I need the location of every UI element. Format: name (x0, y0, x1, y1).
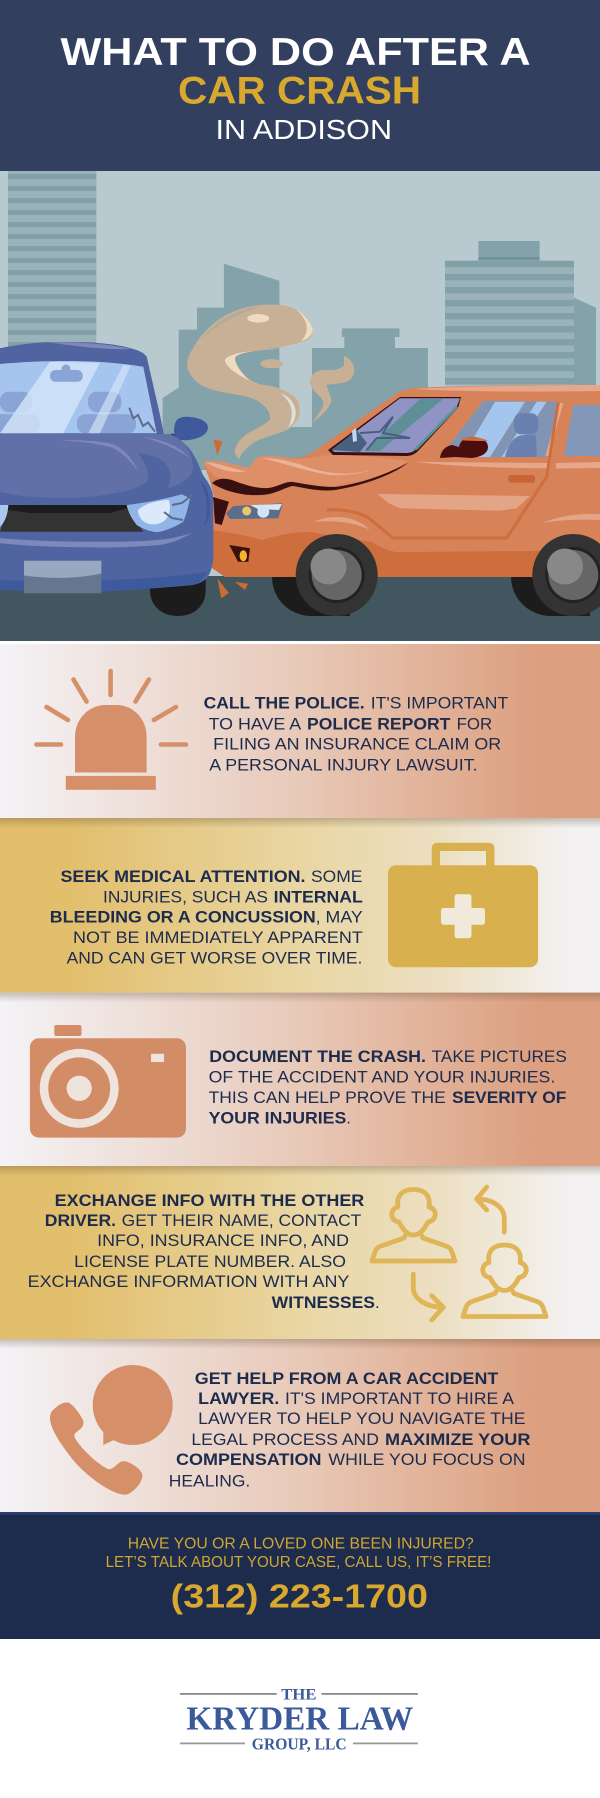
person two (463, 1245, 546, 1316)
text: get help from a lawyer: LAWYER. (198, 1389, 279, 1408)
title line: car crash: CAR CRASH (178, 70, 421, 113)
blue car tyre (150, 570, 206, 616)
title line: what to do after a: WHAT TO DO AFTER A (60, 31, 530, 74)
blue car grille (0, 505, 143, 532)
panel: call the police (0, 644, 600, 818)
text: call the police: POLICE REPORT (307, 715, 450, 734)
text: document the crash: SEVERITY OF (452, 1088, 566, 1107)
crumpled hood (203, 455, 408, 495)
person one (372, 1190, 455, 1261)
text: get help from a lawyer: LEGAL PROCESS AND (191, 1430, 379, 1449)
bumper fog light (229, 545, 250, 562)
text: get help from a lawyer: HEALING. (169, 1471, 250, 1490)
text: exchange info: WITNESSES (272, 1293, 375, 1312)
text: call the police: FOR (457, 715, 492, 734)
side mirror (440, 437, 488, 458)
text: seek medical attention (50, 867, 363, 968)
text: document the crash (209, 1047, 567, 1127)
blue car body (0, 434, 214, 592)
cta question: HAVE YOU OR A LOVED ONE BEEN INJURED? (128, 1536, 474, 1552)
text: document the crash: TAKE PICTURES (432, 1047, 567, 1066)
text: exchange info: INFO, INSURANCE INFO, AND (97, 1231, 349, 1250)
icon: camera (30, 1025, 186, 1138)
text: exchange info: GET THEIR NAME, CONTACT (122, 1211, 361, 1230)
text: seek medical attention: SOME (311, 867, 362, 886)
text: exchange info (28, 1191, 380, 1312)
hood crack (212, 462, 408, 495)
door crease (327, 403, 558, 538)
arrow down-right (413, 1274, 443, 1320)
text: document the crash: YOUR INJURIES (209, 1108, 346, 1127)
blue car headlight (0, 494, 192, 532)
panel: get help from a lawyer (0, 1339, 600, 1512)
windshield (328, 397, 461, 456)
blue car mirror (171, 417, 208, 441)
text: exchange info: LICENSE PLATE NUMBER. ALSO (74, 1252, 346, 1271)
title line: in addison: IN ADDISON (216, 114, 392, 145)
illustration: car crash scene (0, 171, 600, 641)
icon: first aid kit (388, 843, 538, 967)
text: call the police (204, 694, 508, 774)
sky (0, 171, 600, 641)
text: document the crash: THIS CAN HELP PROVE THE (209, 1088, 446, 1107)
smoke (187, 305, 354, 459)
lower sill (212, 530, 600, 577)
text: seek medical attention: INJURIES, SUCH AS (103, 887, 268, 906)
roof highlight (413, 385, 600, 392)
blue car cabin (0, 342, 164, 435)
orange car (203, 385, 600, 616)
text: get help from a lawyer: LAWYER TO HELP YOU NAVIGATE THE (198, 1409, 525, 1428)
phone number: (312) 223-1700 (171, 1578, 428, 1616)
blue car windshield (0, 361, 157, 433)
text: exchange info: EXCHANGE INFORMATION WITH ANY (28, 1272, 349, 1291)
text: get help from a lawyer: GET HELP FROM A CAR ACCIDENT (195, 1369, 498, 1388)
text: seek medical attention: , MAY (316, 907, 363, 926)
road (0, 576, 600, 641)
licence plate (24, 561, 101, 593)
text: call the police: TO HAVE A (209, 715, 302, 734)
car body (203, 385, 600, 577)
rear tyres shadow (272, 560, 350, 616)
icon: siren (36, 671, 186, 790)
side window (448, 401, 558, 457)
text: get help from a lawyer: IT'S IMPORTANT TO HIRE A (285, 1389, 515, 1408)
logo: the kryder law group: THE (281, 1686, 316, 1704)
text: exchange info: DRIVER. (45, 1211, 116, 1230)
logo: the kryder law group: GROUP, LLC (252, 1734, 347, 1754)
headlight (226, 503, 283, 519)
text: seek medical attention: BLEEDING OR A CONCUSSION (50, 907, 316, 926)
door highlight (377, 494, 530, 511)
wheel arch highlights (313, 517, 370, 530)
text: document the crash: . (346, 1108, 351, 1127)
rear window (564, 405, 600, 456)
logo: the kryder law group (180, 1686, 418, 1754)
text: exchange info: EXCHANGE INFO WITH THE OTHER (55, 1191, 364, 1210)
blue car (0, 342, 214, 616)
text: seek medical attention: NOT BE IMMEDIATELY APPARENT (73, 928, 363, 947)
cta invitation: LET’S TALK ABOUT YOUR CASE, CALL US, IT’S FREE! (106, 1554, 491, 1571)
title banner (0, 0, 600, 171)
text: get help from a lawyer: MAXIMIZE YOUR (385, 1430, 530, 1449)
logo: the kryder law group: KRYDER LAW (186, 1701, 413, 1738)
text: call the police: A PERSONAL INJURY LAWSUIT. (209, 756, 478, 774)
skyline buildings (8, 171, 596, 470)
impact sparks (213, 439, 248, 598)
exposed engine (213, 497, 229, 525)
pillar highlight (547, 403, 562, 456)
door handle (508, 475, 535, 483)
text: seek medical attention: AND CAN GET WORSE OVER TIME. (67, 948, 362, 968)
text: document the crash: OF THE ACCIDENT AND YOUR INJURIES. (209, 1068, 555, 1086)
text: exchange info: . (375, 1293, 380, 1312)
blue car bumper highlight (0, 532, 193, 548)
blue car hood (0, 434, 193, 498)
panel: seek medical attention (0, 818, 600, 993)
panel: document the crash (0, 993, 600, 1166)
arrow up-left (477, 1187, 504, 1232)
text: seek medical attention: INTERNAL (274, 887, 363, 906)
call to action banner (0, 1512, 600, 1639)
text: document the crash: DOCUMENT THE CRASH. (209, 1047, 426, 1066)
text: call the police: IT'S IMPORTANT (371, 694, 508, 713)
panel: exchange info (0, 1166, 600, 1339)
front wheel (296, 534, 378, 616)
text: get help from a lawyer: COMPENSATION (176, 1450, 322, 1469)
icon: two people exchanging info (372, 1187, 546, 1320)
belt highlight (413, 462, 550, 468)
text: call the police: CALL THE POLICE. (204, 694, 365, 713)
text: get help from a lawyer: WHILE YOU FOCUS ON (328, 1450, 526, 1469)
text: call the police: FILING AN INSURANCE CLAIM OR (213, 734, 501, 754)
text: get help from a lawyer (169, 1369, 530, 1490)
rear wheel (532, 534, 600, 616)
text: seek medical attention: SEEK MEDICAL ATTENTION. (60, 867, 306, 886)
icon: phone and speech bubble (50, 1365, 173, 1495)
